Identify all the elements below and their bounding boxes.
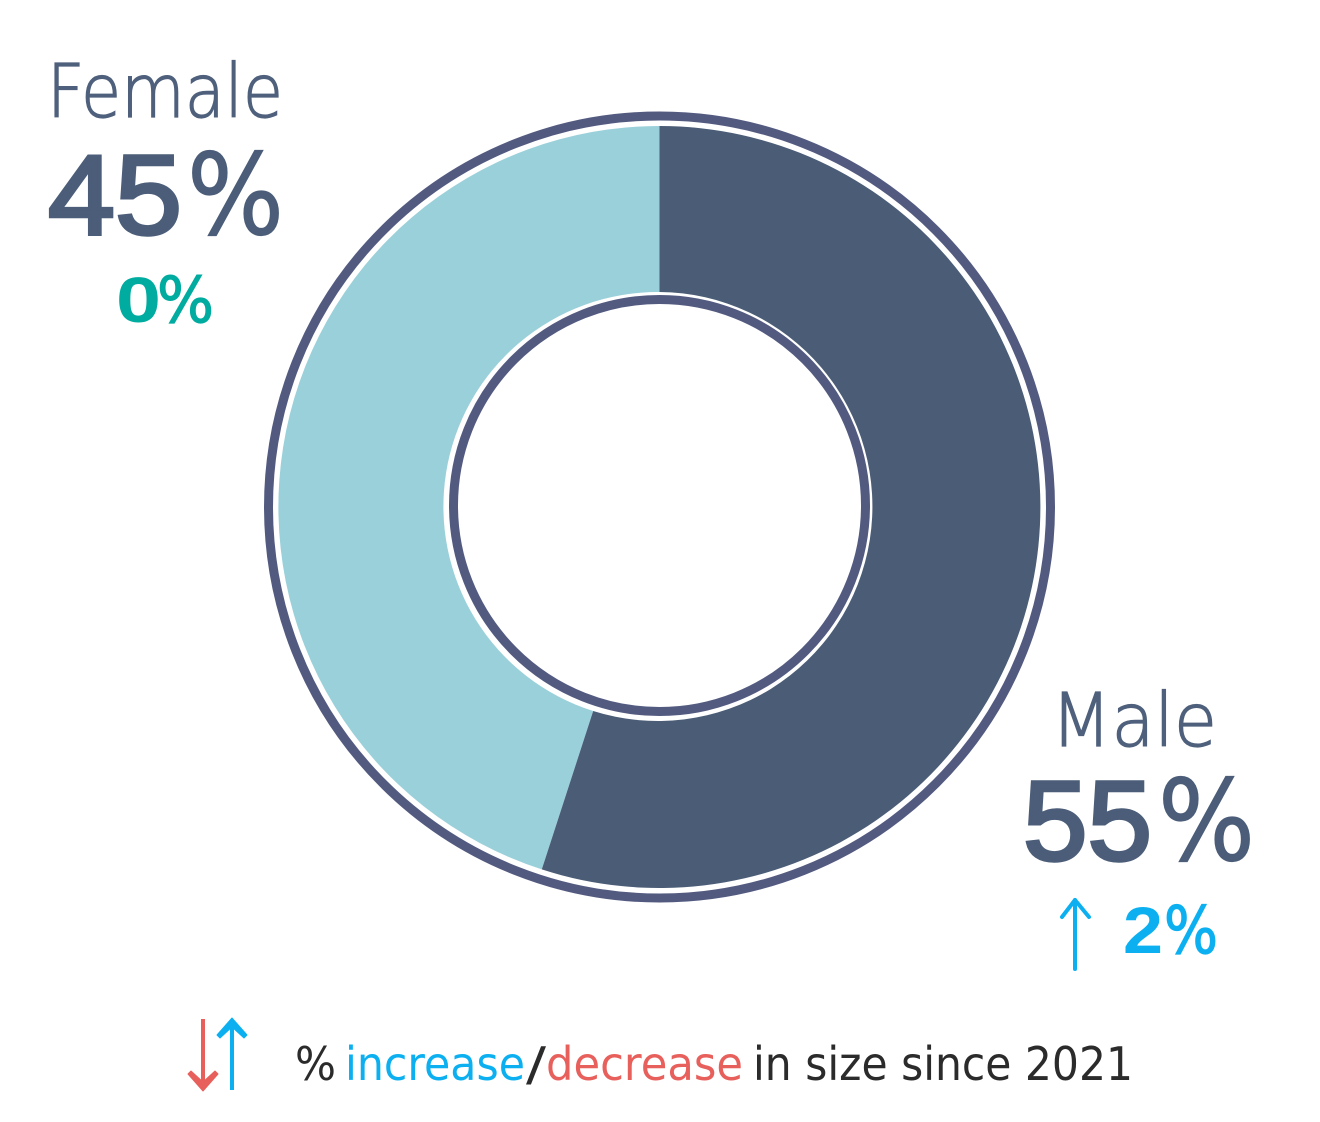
donut chart — [268, 116, 1050, 898]
outer ring — [268, 116, 1050, 898]
icon: increase arrow — [217, 1018, 247, 1090]
male percentage: 55 — [1023, 758, 1152, 884]
male heading: Male — [1051, 678, 1217, 764]
male change — [1123, 893, 1218, 969]
female change — [116, 264, 214, 337]
segment: male 55% — [542, 126, 1040, 888]
label: female — [47, 49, 284, 337]
legend text: in size since 2021 — [753, 1037, 1133, 1091]
female percentage — [48, 131, 284, 261]
female change: % — [157, 264, 214, 337]
segment: female 45% — [278, 126, 660, 869]
female heading: Female — [47, 49, 283, 135]
male change: % — [1164, 894, 1218, 969]
legend text: decrease — [546, 1037, 743, 1091]
female change: 0 — [116, 264, 161, 336]
icon: up arrow for male change — [1062, 900, 1089, 969]
label: male — [1023, 678, 1255, 969]
male percentage: % — [1158, 757, 1255, 887]
male percentage — [1023, 757, 1255, 887]
legend text — [295, 1037, 1133, 1091]
legend text: increase — [345, 1037, 525, 1091]
female percentage: 45 — [48, 132, 182, 258]
legend text: / — [526, 1037, 547, 1091]
inner ring — [454, 300, 866, 712]
icon: decrease arrow — [188, 1019, 218, 1091]
legend — [188, 1018, 1133, 1091]
female percentage: % — [187, 131, 284, 261]
legend text: % — [295, 1037, 336, 1091]
male change: 2 — [1123, 893, 1163, 967]
